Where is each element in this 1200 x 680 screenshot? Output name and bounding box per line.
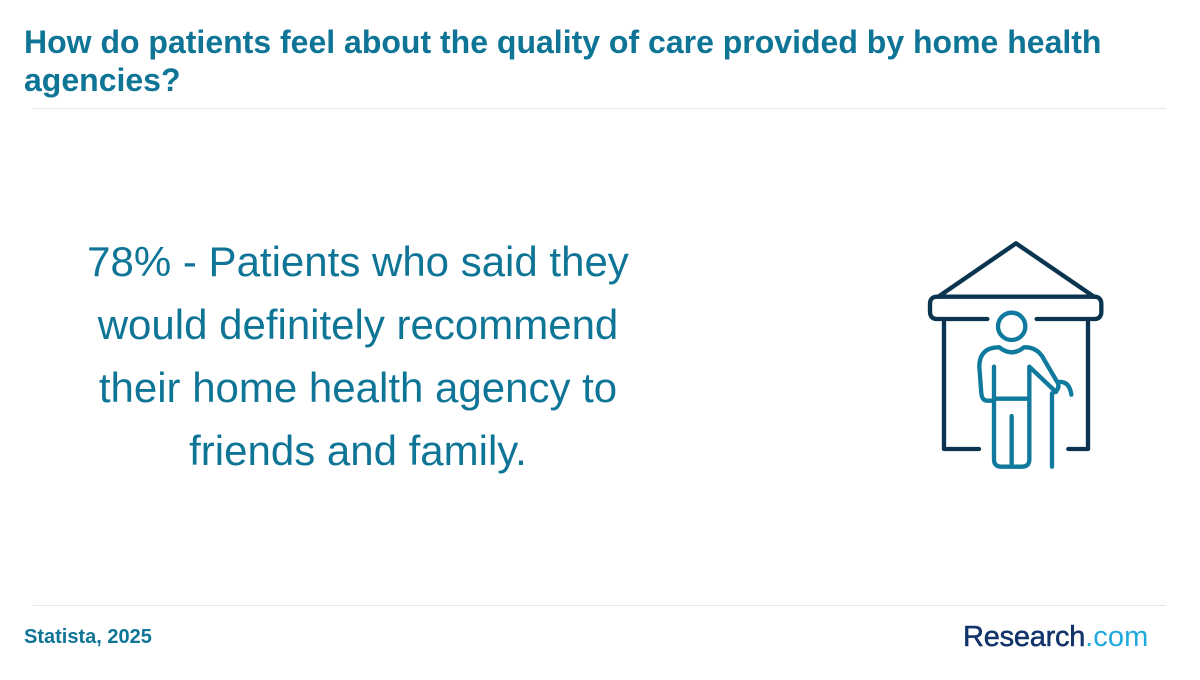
source note: Statista, 2025	[24, 626, 152, 648]
main statistic text: would definitely recommend	[98, 301, 618, 348]
icon: elderly patient with cane in house	[928, 241, 1104, 469]
icon part: house	[930, 243, 1101, 449]
main statistic text: 78% - Patients who said they	[87, 238, 629, 285]
icon part: person with cane	[979, 313, 1071, 467]
logo: Research.com: Research.com	[963, 621, 1148, 653]
title: How do patients feel about the quality of care provided by home health agencies?	[24, 24, 1101, 98]
main statistic text	[87, 238, 629, 474]
main statistic text: their home health agency to	[99, 364, 617, 411]
main statistic text: friends and family.	[189, 427, 527, 474]
